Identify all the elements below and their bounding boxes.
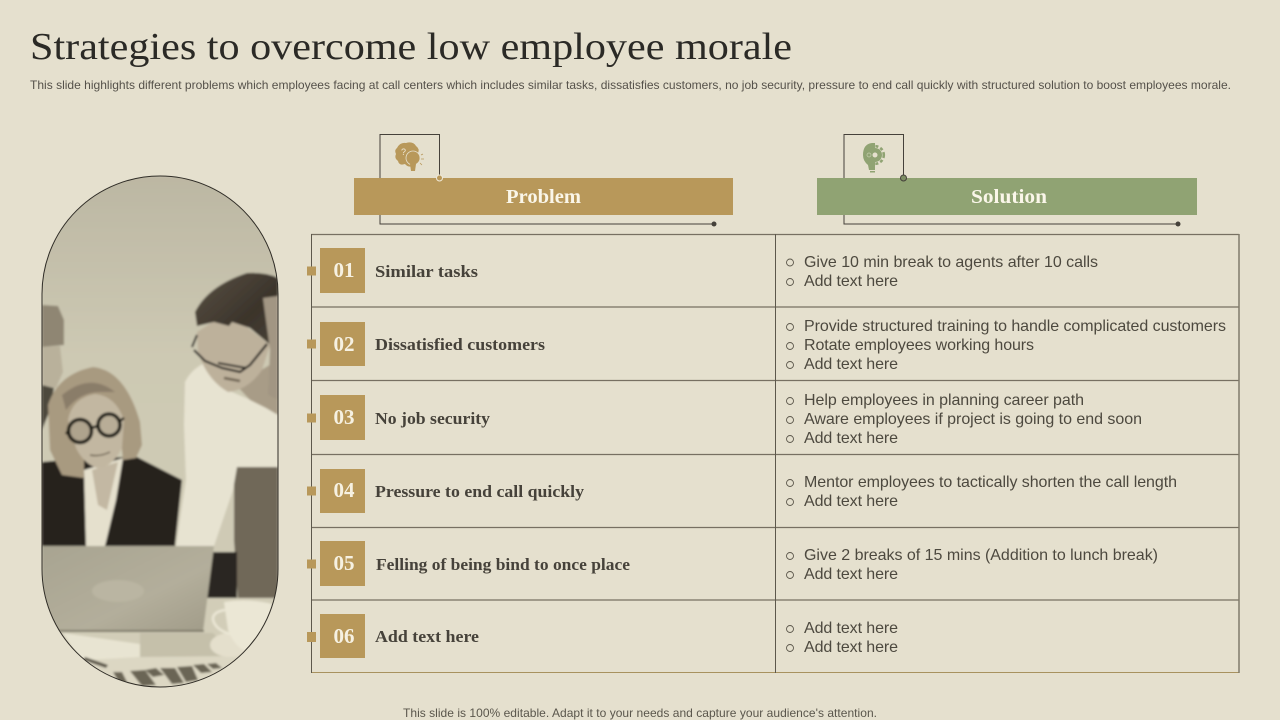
row 6: Add text here xyxy=(375,627,479,646)
row 2: Provide structured training to handle complicated customers xyxy=(804,318,1226,335)
icon frame: solution xyxy=(844,134,1180,226)
icon: brain with question mark and light bulb xyxy=(395,142,424,171)
row 4: Pressure to end call quickly xyxy=(375,482,585,501)
dark equipment behind laptop xyxy=(206,552,237,598)
row 5: Give 2 breaks of 15 mins (Addition to lunch break) xyxy=(804,547,1158,564)
row 6 xyxy=(307,614,898,658)
row 4 xyxy=(307,469,1177,513)
right woman hair xyxy=(195,273,278,350)
left woman glasses xyxy=(68,420,92,442)
row 3: Add text here xyxy=(804,430,898,447)
header: problem: Problem xyxy=(506,186,581,208)
row 3: Help employees in planning career path xyxy=(804,392,1084,409)
header: solution xyxy=(817,175,1197,215)
right woman blouse xyxy=(176,362,278,546)
header: solution: Solution xyxy=(971,186,1047,208)
icon: light bulb with gear xyxy=(863,143,884,172)
icon frame: problem xyxy=(380,134,716,226)
row 5: 05 xyxy=(334,551,354,575)
right woman glasses xyxy=(192,335,197,347)
subtitle: This slide highlights different problems which employees facing at call centers which includes similar tasks, dissatisfies customers, no job security, pressure to end call quickly with structured solution to boost employees morale. xyxy=(30,78,1231,92)
row 1: 01 xyxy=(334,258,354,282)
row 4: Add text here xyxy=(804,493,898,510)
papers xyxy=(64,632,140,663)
right woman face xyxy=(197,320,270,392)
footer note: This slide is 100% editable. Adapt it to your needs and capture your audience's attention. xyxy=(403,706,877,720)
chart stripes on paper xyxy=(113,663,222,688)
row 2 xyxy=(307,318,1226,373)
photo: two women at a laptop in rounded frame xyxy=(40,176,280,690)
title: Strategies to overcome low employee morale xyxy=(30,26,792,68)
row 2: Dissatisfied customers xyxy=(375,335,546,354)
laptop xyxy=(42,546,214,632)
left woman face xyxy=(68,394,124,468)
row 1 xyxy=(307,248,1098,293)
cup xyxy=(224,600,272,652)
row 5: Felling of being bind to once place xyxy=(376,555,630,574)
right woman lips xyxy=(224,378,240,381)
row 1: Similar tasks xyxy=(375,262,479,281)
row 1: Add text here xyxy=(804,273,898,290)
row 3 xyxy=(307,392,1142,447)
chair and background figure xyxy=(42,305,64,347)
row 2: Rotate employees working hours xyxy=(804,337,1034,354)
left woman hair xyxy=(48,367,142,478)
row 4: 04 xyxy=(334,478,355,502)
row 5: Add text here xyxy=(804,566,898,583)
row 6: Add text here xyxy=(804,620,898,637)
left woman mouth xyxy=(90,452,110,456)
row 2: 02 xyxy=(334,332,354,356)
saucer xyxy=(210,634,244,657)
row 3: Aware employees if project is going to end soon xyxy=(804,411,1142,428)
table xyxy=(237,596,274,602)
row 5 xyxy=(307,541,1158,586)
icon: brain with question mark and light bulb: ? xyxy=(401,147,406,157)
header: problem xyxy=(354,175,733,215)
wall between figures xyxy=(212,465,234,552)
row 2: Add text here xyxy=(804,356,898,373)
row 6: 06 xyxy=(334,624,354,648)
row 3: No job security xyxy=(375,409,491,428)
row 4: Mentor employees to tactically shorten the call length xyxy=(804,474,1177,491)
row 3: 03 xyxy=(334,405,354,429)
row 6: Add text here xyxy=(804,639,898,656)
row 1: Give 10 min break to agents after 10 calls xyxy=(804,254,1098,271)
left woman blouse and neck xyxy=(84,458,123,546)
table grid xyxy=(311,234,1239,673)
right woman neck xyxy=(240,365,278,416)
right woman skirt xyxy=(234,467,278,600)
left woman jacket xyxy=(42,457,182,546)
